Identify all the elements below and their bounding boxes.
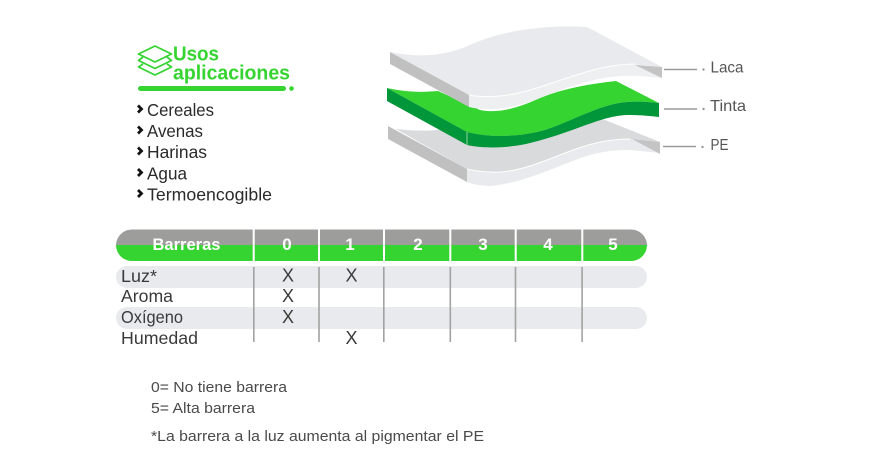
table row labels: Humedad [121,328,198,348]
label: Laca: Laca [710,60,744,76]
legend notes: 5= Alta barrera [151,400,256,417]
diagram: layer Laca [390,26,662,109]
label: Laca [664,60,744,76]
table header [116,229,647,261]
table rows background [116,266,647,329]
heading underline [138,86,294,91]
table marks: X [282,286,294,306]
list: usos: Agua [147,164,187,184]
list: usos [138,100,272,204]
table header: Barreras [152,235,220,254]
diagram: layer Tinta [387,81,659,147]
table header: 3 [478,235,488,254]
legend notes: *La barrera a la luz aumenta al pigmentar el PE [151,428,484,445]
list: usos: Termoencogible [147,184,272,204]
table header: 5 [608,235,618,254]
diagram: layer PE [388,110,660,186]
table row labels: Luz* [121,266,157,286]
label: PE: PE [710,137,728,154]
table column dividers [253,267,583,342]
heading: Usos aplicaciones: Usos [173,44,219,66]
list: usos: Avenas [147,121,203,141]
label: Tinta [664,98,746,115]
label: PE [663,137,728,154]
table row labels: Aroma [121,286,173,306]
table marks: X [282,266,294,286]
table header: 1 [345,235,355,254]
table header: 4 [543,235,553,254]
label: Tinta: Tinta [710,98,746,115]
icon: stacked layers [138,46,172,75]
heading: Usos aplicaciones: aplicaciones [173,62,290,84]
table row labels: Oxígeno [121,307,183,327]
list: usos: Cereales [147,100,214,120]
table marks: X [345,328,358,348]
heading: Usos aplicaciones [173,44,290,84]
table marks [282,266,358,348]
legend notes: 0= No tiene barrera [151,379,288,396]
table header: 2 [413,235,423,254]
table row labels [121,266,198,348]
legend notes [151,379,484,445]
table marks: X [282,307,294,327]
table marks: X [345,266,358,286]
table header: 0 [282,235,292,254]
list: usos: Harinas [147,142,207,162]
